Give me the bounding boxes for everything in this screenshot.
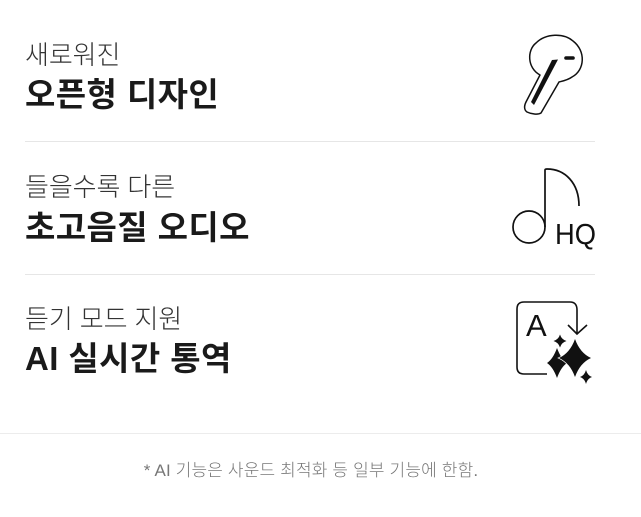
feature 3 subtitle: 듣기 모드 지원 <box>25 304 182 334</box>
feature 1 heading: 오픈형 디자인 <box>25 76 219 113</box>
icon: earbud <box>524 34 583 115</box>
footer divider <box>0 433 641 434</box>
divider <box>25 274 595 275</box>
icon: AI translation <box>516 301 592 384</box>
divider <box>25 141 595 142</box>
icon: AI translation: A <box>526 308 547 343</box>
icon: music note HQ: HQ <box>555 219 596 251</box>
icon: music note HQ <box>512 168 596 251</box>
feature 2 heading: 초고음질 오디오 <box>25 209 250 246</box>
feature 1 subtitle: 새로워진 <box>25 40 120 70</box>
footnote: * AI 기능은 사운드 최적화 등 일부 기능에 한함. <box>144 461 478 480</box>
feature 2 subtitle: 들을수록 다른 <box>25 172 175 202</box>
feature 3 heading: AI 실시간 통역 <box>25 340 232 377</box>
